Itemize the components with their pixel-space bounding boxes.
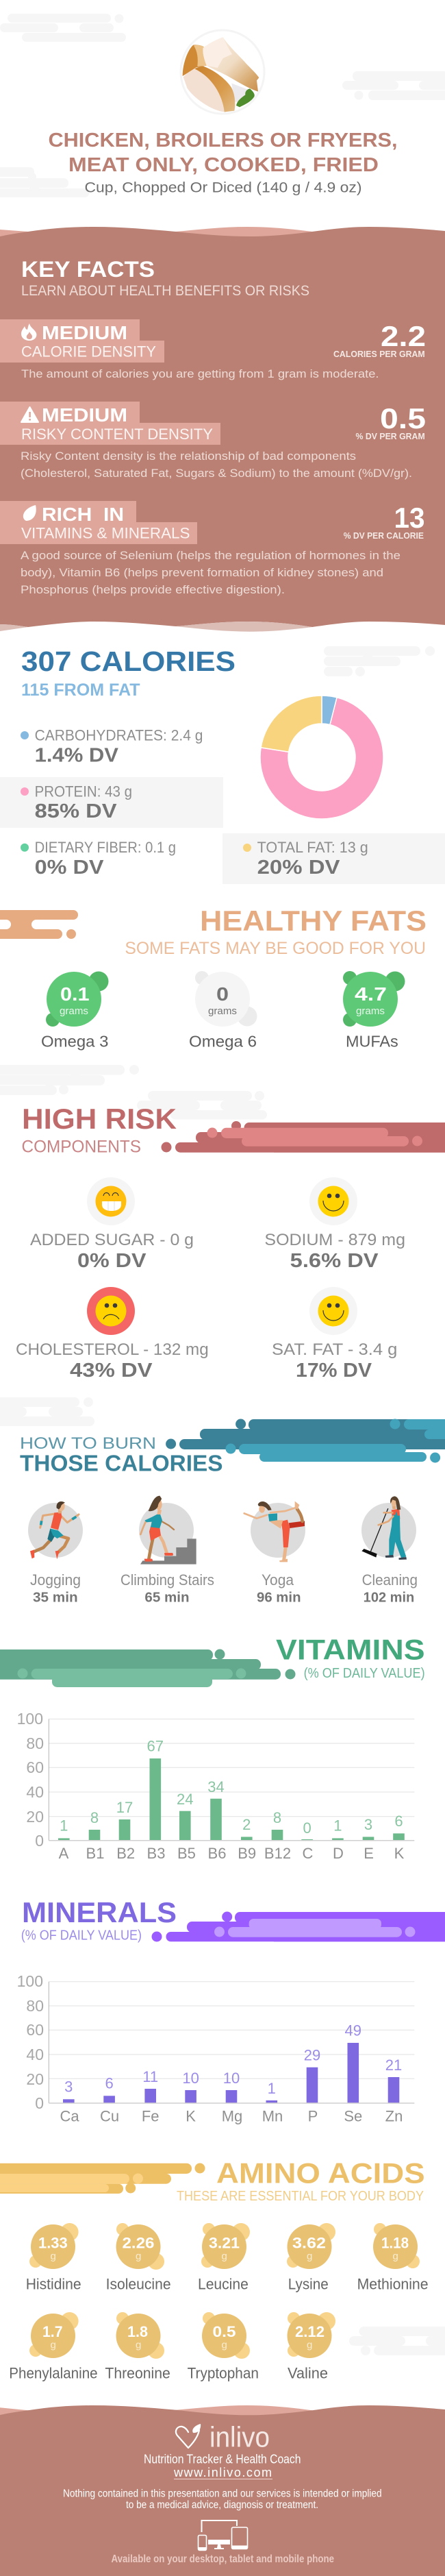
- amino: histidine: [26, 2223, 81, 2293]
- bar chart: minerals: 3: [64, 2078, 73, 2096]
- panel: how to burn those calories: [20, 1419, 445, 1606]
- bar chart: minerals: 49: [345, 2022, 361, 2039]
- bar chart: minerals: 20: [26, 2070, 44, 2088]
- decoration: orange bars: [0, 910, 78, 939]
- bar chart: minerals: Zn: [385, 2108, 403, 2125]
- amino: valine: 2.12: [295, 2323, 325, 2340]
- macro: total fat: 20% DV: [257, 857, 340, 879]
- amino: valine: [288, 2312, 335, 2382]
- availability note: Available on your desktop, tablet and mobile phone: [111, 2553, 334, 2565]
- bar chart: vitamins: D: [333, 1845, 344, 1862]
- fat: omega 3: [41, 972, 108, 1051]
- bar chart: vitamins: 20: [26, 1808, 44, 1826]
- fat: omega 3: grams: [60, 1005, 88, 1017]
- activity: climbing stairs: 65 min: [144, 1591, 189, 1606]
- icon: smiling face: [318, 1186, 349, 1217]
- bar chart: vitamins: 80: [26, 1734, 44, 1752]
- bar chart: vitamins: 40: [26, 1783, 44, 1801]
- icon: runner: [30, 1501, 79, 1559]
- heading: how to burn: HOW TO BURN: [20, 1434, 156, 1453]
- fat: omega 3: 0.1: [60, 983, 90, 1005]
- heading: healthy fats: [125, 905, 427, 958]
- risk: sodium: SODIUM - 879 mg: [264, 1231, 405, 1249]
- risk: added sugar: [30, 1177, 194, 1272]
- icon: smiling face: [318, 1295, 349, 1327]
- bar chart: vitamins: B9: [238, 1845, 256, 1862]
- fat: omega 6: [189, 971, 257, 1051]
- bar chart: minerals: 80: [26, 1997, 44, 2015]
- activity: yoga: [244, 1501, 305, 1606]
- activity: yoga: 96 min: [257, 1591, 301, 1606]
- bar chart: minerals: 0: [35, 2094, 44, 2112]
- amino: lysine: Lysine: [288, 2276, 329, 2293]
- fact: risky content density: RISKY CONTENT DENSITY: [21, 426, 213, 443]
- bar chart: vitamins: B6: [208, 1845, 226, 1862]
- decoration: red bars: [162, 1121, 445, 1153]
- icon: devices: [199, 2520, 248, 2551]
- fact: risky content density: 0.5: [380, 402, 426, 434]
- fact: calorie density: CALORIES PER GRAM: [333, 349, 425, 359]
- amino: histidine: 1.33: [38, 2235, 68, 2252]
- fact: risky content density: % DV PER GRAM: [356, 431, 425, 441]
- serving size: Cup, Chopped Or Diced (140 g / 4.9 oz): [85, 180, 361, 196]
- bar chart: vitamins: B5: [177, 1845, 196, 1862]
- bar chart: minerals: K: [186, 2108, 196, 2125]
- fat: MUFAs: grams: [356, 1005, 385, 1017]
- title: MEAT ONLY, COOKED, FRIED: [68, 154, 379, 176]
- amino: lysine: [287, 2223, 335, 2293]
- heading: healthy fats: SOME FATS MAY BE GOOD FOR YOU: [125, 939, 426, 958]
- risk: saturated fat: SAT. FAT - 3.4 g: [272, 1340, 397, 1359]
- bar chart: vitamins: 2: [242, 1816, 251, 1833]
- heading: minerals: [21, 1896, 177, 1943]
- fact: calorie density: MEDIUM: [42, 322, 127, 343]
- food image: fried chicken: [181, 30, 264, 114]
- bar chart: minerals: Mn: [262, 2108, 283, 2125]
- title: [48, 130, 397, 176]
- bar chart: minerals: [17, 1972, 414, 2125]
- panel: key facts: [0, 227, 445, 632]
- amino: valine: Valine: [288, 2365, 328, 2382]
- amino: methionine: [357, 2223, 429, 2293]
- amino: tryptophan: [188, 2312, 259, 2382]
- bar chart: vitamins: B1: [86, 1845, 104, 1862]
- macro: protein: PROTEIN: 43 g: [35, 783, 132, 800]
- activity: jogging: Jogging: [30, 1571, 81, 1588]
- risk: cholesterol: [16, 1287, 209, 1382]
- decoration: teal bars: [166, 1419, 445, 1462]
- bar chart: vitamins: K: [394, 1845, 405, 1862]
- amino: phenylalanine: 1.7: [42, 2323, 63, 2340]
- panel: minerals: [17, 1896, 445, 2125]
- bar chart: vitamins: 6: [394, 1813, 403, 1830]
- amino: isoleucine: Isoleucine: [106, 2276, 171, 2293]
- amino: valine: g: [307, 2340, 312, 2351]
- fat: omega 3: Omega 3: [41, 1033, 108, 1051]
- bar chart: vitamins: 0: [303, 1819, 312, 1837]
- bar chart: minerals: P: [308, 2108, 318, 2125]
- panel: amino acids: [0, 2157, 429, 2382]
- fact: rich in vitamins and minerals: body), Vitamin B6 (helps prevent formation of kidney stones) and: [21, 566, 383, 579]
- fact: calorie density: [0, 319, 426, 380]
- bar chart: minerals: 21: [385, 2057, 402, 2074]
- risk: added sugar: 0% DV: [77, 1250, 147, 1272]
- heading: healthy fats: HEALTHY FATS: [200, 905, 427, 937]
- heading: key facts: [21, 257, 309, 299]
- risk: cholesterol: CHOLESTEROL - 132 mg: [16, 1340, 209, 1359]
- heading: minerals: (% OF DAILY VALUE): [21, 1928, 142, 1943]
- amino: isoleucine: g: [136, 2250, 141, 2262]
- bar chart: vitamins: 60: [26, 1758, 44, 1776]
- heading: vitamins: (% OF DAILY VALUE): [304, 1666, 425, 1681]
- activity: climbing stairs: [120, 1496, 214, 1606]
- bar chart: minerals: Fe: [142, 2108, 160, 2125]
- heading: how to burn: THOSE CALORIES: [20, 1451, 223, 1476]
- icon: warning: [21, 407, 38, 422]
- fact: calorie density: 2.2: [381, 320, 426, 352]
- fat: MUFAs: [343, 971, 405, 1051]
- amino: lysine: g: [307, 2250, 312, 2262]
- fact: rich in vitamins and minerals: Phosphorus (helps provide effective digestion).: [21, 583, 285, 596]
- fat: omega 6: Omega 6: [189, 1033, 257, 1051]
- bar chart: vitamins: 1: [333, 1817, 342, 1835]
- amino: methionine: Methionine: [357, 2276, 429, 2293]
- amino: threonine: Threonine: [105, 2365, 170, 2382]
- panel: healthy fats: [0, 905, 427, 1051]
- bar chart: vitamins: B2: [116, 1845, 135, 1862]
- panel: vitamins: [0, 1634, 425, 1862]
- macro: carbohydrates: CARBOHYDRATES: 2.4 g: [35, 727, 203, 744]
- amino: tryptophan: g: [222, 2340, 227, 2351]
- amino: phenylalanine: g: [51, 2340, 56, 2351]
- amino: leucine: Leucine: [198, 2276, 249, 2293]
- heading: vitamins: [276, 1634, 425, 1681]
- icon: yoga pose: [244, 1501, 305, 1562]
- heading: 307 calories: 307 CALORIES: [21, 646, 236, 677]
- heading: amino acids: [177, 2157, 425, 2204]
- bar chart: vitamins: B12: [264, 1845, 291, 1862]
- fact: risky content density: [0, 402, 426, 480]
- icon: stair climber: [140, 1496, 196, 1565]
- fat: omega 6: 0: [216, 983, 229, 1005]
- website link: www.inlivo.com: [173, 2466, 272, 2479]
- macro: protein: 85% DV: [35, 800, 117, 822]
- macro: total fat: [222, 833, 445, 884]
- amino: isoleucine: 2.26: [122, 2235, 155, 2252]
- fact: rich in vitamins and minerals: 13: [394, 502, 424, 534]
- fat: MUFAs: MUFAs: [346, 1033, 398, 1051]
- macro: carbohydrates: [21, 727, 203, 767]
- macro: dietary fiber: DIETARY FIBER: 0.1 g: [35, 839, 176, 856]
- disclaimer: Nothing contained in this presentation and our services is intended or implied: [63, 2488, 382, 2499]
- icon: person sweeping: [361, 1496, 407, 1560]
- heading: vitamins: VITAMINS: [276, 1634, 425, 1666]
- amino: leucine: [198, 2223, 250, 2293]
- amino: lysine: 3.62: [292, 2235, 326, 2252]
- bar chart: vitamins: 8: [273, 1809, 281, 1826]
- bar chart: vitamins: 67: [147, 1738, 164, 1755]
- fact: risky content density: MEDIUM: [42, 404, 127, 426]
- amino: histidine: Histidine: [26, 2276, 81, 2293]
- bar chart: minerals: 29: [304, 2047, 320, 2064]
- amino: phenylalanine: [9, 2312, 98, 2382]
- activity: cleaning: Cleaning: [362, 1571, 418, 1588]
- fact: rich in vitamins and minerals: VITAMINS & MINERALS: [21, 525, 190, 542]
- bar chart: minerals: 60: [26, 2021, 44, 2039]
- activity: jogging: [28, 1501, 83, 1606]
- bar chart: minerals: 10: [182, 2070, 199, 2087]
- fact: calorie density: The amount of calories you are getting from 1 gram is moderate.: [21, 367, 379, 380]
- fact: rich in vitamins and minerals: % DV PER CALORIE: [344, 530, 424, 541]
- bar chart: minerals: 40: [26, 2046, 44, 2063]
- risk: added sugar: ADDED SUGAR - 0 g: [30, 1231, 194, 1249]
- risk: saturated fat: [272, 1287, 397, 1382]
- risk: saturated fat: 17% DV: [296, 1360, 372, 1382]
- bar chart: vitamins: [17, 1710, 414, 1862]
- fat: MUFAs: 4.7: [355, 983, 387, 1005]
- panel: calories: [0, 646, 445, 884]
- risk: sodium: 5.6% DV: [290, 1250, 379, 1272]
- tagline: Nutrition Tracker & Health Coach: [144, 2452, 301, 2466]
- amino: methionine: g: [393, 2250, 398, 2262]
- macro: total fat: TOTAL FAT: 13 g: [257, 839, 368, 856]
- risk: sodium: [264, 1177, 405, 1272]
- icon: grinning face: [96, 1186, 126, 1217]
- donut chart: [260, 696, 383, 819]
- icon: leaf: [23, 505, 36, 521]
- activity: climbing stairs: Climbing Stairs: [120, 1571, 214, 1588]
- bar chart: minerals: 1: [268, 2080, 276, 2097]
- amino: leucine: 3.21: [209, 2235, 240, 2252]
- heading: how to burn: [20, 1434, 223, 1476]
- disclaimer: [63, 2488, 382, 2511]
- heading: high risk: COMPONENTS: [22, 1138, 141, 1157]
- fact: risky content density: (Cholesterol, Saturated Fat, Sugars & Sodium) to the amount (%DV/gr).: [21, 467, 412, 480]
- bar chart: minerals: 100: [17, 1972, 43, 1990]
- risk: cholesterol: 43% DV: [70, 1360, 153, 1382]
- bar chart: vitamins: 17: [116, 1799, 133, 1816]
- heading: 307 calories: 115 FROM FAT: [21, 680, 140, 700]
- heading: high risk: HIGH RISK: [22, 1103, 177, 1135]
- logo: inlivo: inlivo: [209, 2421, 270, 2453]
- amino: leucine: g: [222, 2250, 227, 2262]
- bar chart: minerals: Se: [344, 2108, 362, 2125]
- bar chart: minerals: Ca: [60, 2108, 79, 2125]
- fact: rich in vitamins and minerals: RICH IN: [42, 504, 124, 525]
- panel: high risk components: [16, 1103, 445, 1382]
- macro: dietary fiber: [21, 839, 176, 879]
- title: CHICKEN, BROILERS OR FRYERS,: [48, 130, 397, 151]
- amino: threonine: g: [136, 2340, 141, 2351]
- bar chart: vitamins: A: [59, 1845, 69, 1862]
- disclaimer: to be a medical advice, diagnosis or treatment.: [126, 2499, 318, 2511]
- activity: cleaning: 102 min: [364, 1591, 414, 1606]
- bar chart: minerals: 10: [223, 2070, 240, 2087]
- fact: calorie density: CALORIE DENSITY: [21, 343, 156, 360]
- bar chart: vitamins: 100: [17, 1710, 43, 1728]
- bar chart: vitamins: 0: [35, 1832, 44, 1850]
- bar chart: minerals: Mg: [222, 2108, 242, 2125]
- bar chart: vitamins: E: [364, 1845, 374, 1862]
- amino: tryptophan: 0.5: [212, 2323, 236, 2340]
- bar chart: minerals: 11: [142, 2068, 158, 2085]
- bar chart: vitamins: 1: [60, 1817, 68, 1835]
- bar chart: vitamins: 8: [90, 1809, 99, 1826]
- bar chart: vitamins: C: [302, 1845, 313, 1862]
- heading: high risk: [22, 1103, 177, 1157]
- activity: jogging: 35 min: [33, 1591, 78, 1606]
- amino: tryptophan: Tryptophan: [188, 2365, 259, 2382]
- bar chart: vitamins: B3: [147, 1845, 165, 1862]
- fat: omega 6: grams: [208, 1005, 237, 1017]
- heading: 307 calories: [21, 646, 236, 700]
- heading: amino acids: AMINO ACIDS: [216, 2157, 425, 2189]
- icon: flame: [21, 323, 36, 341]
- activity: cleaning: [361, 1496, 418, 1606]
- macro: carbohydrates: 1.4% DV: [35, 745, 119, 767]
- activity: yoga: Yoga: [262, 1571, 294, 1588]
- amino: threonine: 1.8: [127, 2323, 148, 2340]
- heading: key facts: LEARN ABOUT HEALTH BENEFITS OR RISKS: [21, 283, 309, 299]
- icon: sad face: [96, 1295, 126, 1327]
- decoration: yellow bars: [0, 2163, 205, 2194]
- logo: inlivo: [176, 2421, 270, 2453]
- decoration: purple bars: [152, 1912, 445, 1942]
- amino: isoleucine: [106, 2223, 171, 2293]
- panel: footer: [0, 2405, 445, 2576]
- decoration: green bars: [0, 1649, 296, 1687]
- bar chart: minerals: 6: [105, 2075, 114, 2092]
- bar chart: minerals: Cu: [100, 2108, 119, 2125]
- amino: threonine: [105, 2312, 170, 2382]
- fact: rich in vitamins and minerals: A good source of Selenium (helps the regulation of hormones in the: [21, 549, 400, 562]
- amino: phenylalanine: Phenylalanine: [9, 2365, 98, 2382]
- bar chart: vitamins: 3: [364, 1816, 372, 1833]
- bar chart: vitamins: 24: [177, 1791, 194, 1808]
- fact: rich in vitamins and minerals: [0, 501, 424, 596]
- macro: protein: [0, 777, 223, 828]
- amino: methionine: 1.18: [381, 2235, 409, 2252]
- heading: minerals: MINERALS: [22, 1896, 177, 1928]
- bar chart: vitamins: 34: [207, 1778, 225, 1795]
- fact: risky content density: Risky Content density is the relationship of bad components: [21, 450, 356, 463]
- amino: histidine: g: [51, 2250, 56, 2262]
- heading: key facts: KEY FACTS: [21, 257, 155, 282]
- macro: dietary fiber: 0% DV: [35, 857, 104, 879]
